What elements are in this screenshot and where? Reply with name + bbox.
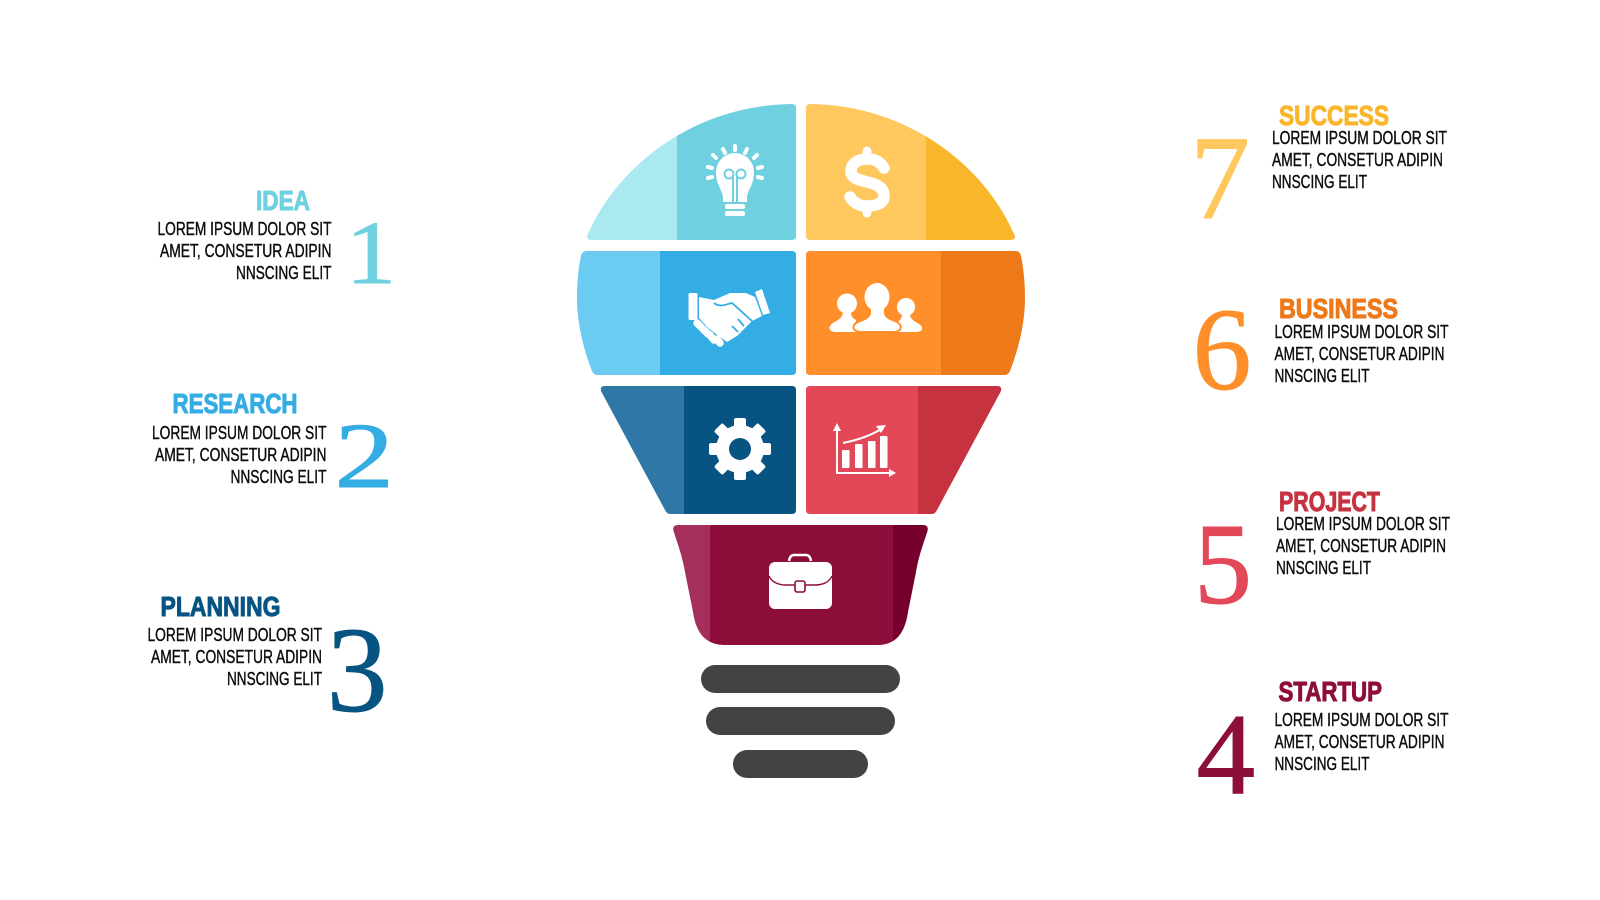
- text block: project description: LOREM IPSUM DOLOR SIT: [1276, 514, 1450, 534]
- segment: success (top right): [806, 104, 1015, 240]
- text block: success description: NNSCING ELIT: [1272, 172, 1367, 192]
- number 3: 3: [327, 603, 388, 738]
- item 4: startup: [1196, 676, 1448, 819]
- text block: project description: [1276, 514, 1450, 578]
- segment: idea (top left): [587, 104, 796, 240]
- heading: startup: STARTUP: [1278, 676, 1382, 707]
- text block: business description: AMET, CONSETUR ADIPIN: [1274, 344, 1444, 364]
- icon: dollar sign: [850, 151, 884, 213]
- icon: growth chart: [833, 423, 896, 477]
- text block: startup description: [1274, 710, 1448, 774]
- text block: planning description: LOREM IPSUM DOLOR SIT: [148, 625, 322, 645]
- number 1: 1: [346, 203, 396, 303]
- text block: research description: LOREM IPSUM DOLOR SIT: [152, 423, 326, 443]
- icon: handshake: [688, 289, 770, 343]
- item 3: planning: [148, 591, 388, 738]
- text block: research description: [152, 423, 326, 487]
- text block: startup description: AMET, CONSETUR ADIPIN: [1274, 732, 1444, 752]
- text block: startup description: NNSCING ELIT: [1274, 754, 1370, 774]
- icon: briefcase: [769, 555, 832, 609]
- segment: business (second row right): [800, 248, 1031, 378]
- item 5: project: [1194, 486, 1450, 629]
- icon: light bulb: [708, 146, 762, 216]
- text block: project description: AMET, CONSETUR ADIPIN: [1276, 536, 1446, 556]
- heading: research: RESEARCH: [172, 388, 298, 419]
- segment: planning (third row left): [600, 386, 796, 514]
- item 7: success: [1190, 100, 1447, 244]
- number 5: 5: [1194, 501, 1252, 629]
- text block: idea description: NNSCING ELIT: [236, 263, 332, 283]
- heading: success: SUCCESS: [1279, 100, 1389, 131]
- bulb screw base: [701, 665, 900, 778]
- text block: business description: LOREM IPSUM DOLOR SIT: [1274, 322, 1448, 342]
- text block: business description: NNSCING ELIT: [1274, 366, 1370, 386]
- segment: project (third row right): [806, 386, 1002, 514]
- text block: startup description: LOREM IPSUM DOLOR SIT: [1274, 710, 1448, 730]
- number 7: 7: [1190, 111, 1250, 244]
- text block: idea description: LOREM IPSUM DOLOR SIT: [158, 219, 332, 239]
- text block: success description: LOREM IPSUM DOLOR SIT: [1272, 128, 1447, 148]
- text block: planning description: AMET, CONSETUR ADIPIN: [151, 647, 322, 667]
- text block: idea description: [158, 219, 332, 283]
- icon: gear: [709, 418, 771, 480]
- item 6: business: [1192, 284, 1448, 415]
- text block: idea description: AMET, CONSETUR ADIPIN: [160, 241, 332, 261]
- text block: planning description: [148, 625, 322, 689]
- text block: planning description: NNSCING ELIT: [227, 669, 322, 689]
- number 6: 6: [1192, 284, 1252, 415]
- text block: research description: AMET, CONSETUR ADIPIN: [155, 445, 326, 465]
- text block: success description: [1272, 128, 1447, 192]
- heading: idea: IDEA: [256, 185, 310, 216]
- number 2: 2: [334, 405, 394, 508]
- text block: success description: AMET, CONSETUR ADIPIN: [1272, 150, 1443, 170]
- lightbulb diagram: [570, 100, 1031, 778]
- heading: project: PROJECT: [1279, 486, 1380, 517]
- item 1: idea: [158, 185, 396, 303]
- icon: group of people: [829, 283, 922, 332]
- text block: project description: NNSCING ELIT: [1276, 558, 1371, 578]
- heading: planning: PLANNING: [160, 591, 280, 622]
- segment: research (second row left): [570, 248, 800, 378]
- heading: business: BUSINESS: [1279, 293, 1398, 324]
- number 4: 4: [1196, 691, 1255, 819]
- segment: startup (bulb collar): [673, 525, 928, 645]
- text block: business description: [1274, 322, 1448, 386]
- item 2: research: [152, 388, 394, 508]
- text block: research description: NNSCING ELIT: [230, 467, 326, 487]
